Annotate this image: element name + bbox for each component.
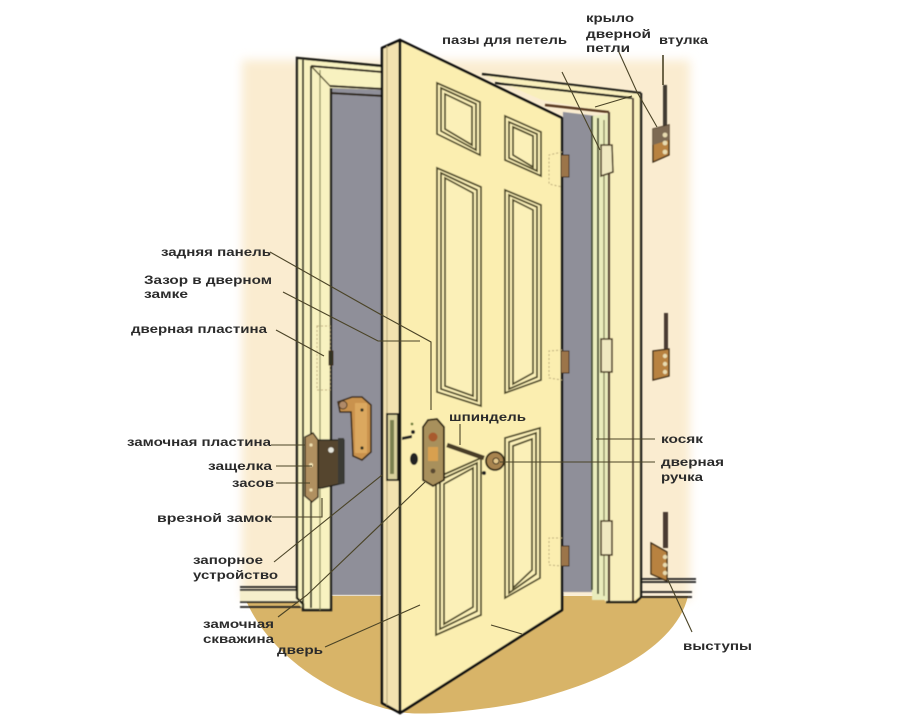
label: locking device: запорное: [193, 553, 263, 567]
label: door handle: дверная: [661, 455, 724, 469]
label: door handle: [661, 455, 724, 484]
door edge lock plate: [387, 414, 398, 480]
label: hinge leaf: крыло: [586, 11, 634, 25]
labels: [127, 11, 752, 657]
label: locking device: [193, 553, 278, 582]
door panels: [436, 83, 541, 635]
keyhole and screws: [402, 423, 418, 465]
label: door plate: дверная пластина: [131, 322, 267, 336]
label: protrusions: выступы: [683, 639, 752, 653]
label: hinge leaf: дверной: [586, 27, 651, 41]
wall background: [242, 60, 690, 600]
label: bolt: засов: [232, 476, 274, 490]
label: hinge leaf: петли: [586, 41, 630, 55]
door hinges: [329, 145, 613, 566]
leader lines: [270, 50, 692, 647]
label: lock plate: замочная пластина: [127, 435, 271, 449]
top and right door frame: [482, 74, 641, 602]
label: locking device: устройство: [193, 568, 278, 582]
label: keyhole: скважина: [203, 632, 274, 646]
label: door: дверь: [277, 643, 323, 657]
floor: [244, 596, 688, 714]
left wall opening: [330, 88, 384, 595]
label: lock gap: замке: [144, 287, 188, 301]
loose hinges with pins: [651, 85, 669, 581]
label: mortise lock: врезной замок: [157, 511, 273, 525]
baseboards: [240, 579, 696, 607]
label: keyhole: замочная: [203, 617, 274, 631]
label: door handle: ручка: [661, 470, 703, 484]
lock faceplate: [423, 419, 444, 486]
label: latch: защелка: [208, 459, 272, 473]
label: hinge mortises: пазы для петель: [442, 33, 567, 47]
left door frame: [297, 58, 384, 610]
label: lock gap: [144, 273, 272, 301]
label: keyhole: [203, 617, 274, 646]
door illustration: [240, 40, 696, 713]
label: lock gap: Зазор в дверном: [144, 273, 272, 287]
label: hinge leaf: [586, 11, 651, 55]
spindle and door knob: [447, 445, 504, 475]
label: bushing: втулка: [659, 33, 708, 47]
door leaf: [382, 40, 562, 713]
mortise lock: [305, 433, 344, 502]
door hinge mortises: [317, 152, 562, 566]
label: back panel: задняя панель: [161, 245, 271, 259]
label: spindle: шпиндель: [449, 410, 526, 424]
strike plate on wall: [338, 397, 371, 460]
label: jamb: косяк: [661, 432, 704, 446]
